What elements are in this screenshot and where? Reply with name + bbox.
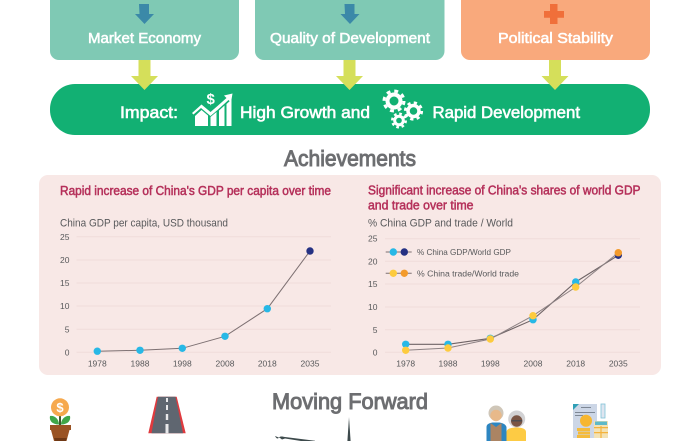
x axis labels: 1998 [481,358,500,368]
x axis labels: 1978 [396,358,415,368]
label: high growth and: High Growth and [240,103,370,122]
icon: down arrow [135,4,154,24]
arrow: market economy to impact [131,60,158,90]
x axis labels: 2008 [216,358,235,368]
y axis labels: 0 [373,348,378,358]
label: rapid development: Rapid Development [432,103,580,122]
x axis labels: 2035 [301,358,320,368]
y axis labels: 0 [65,348,70,358]
panel: achievements charts [39,175,661,375]
chart subtitle: % China GDP and trade / World [368,218,513,230]
GDP series [402,252,622,348]
x axis labels: 2008 [524,358,543,368]
x axis labels: 1978 [88,358,107,368]
icon: road [148,397,186,433]
x axis labels: 1988 [439,358,458,368]
chart: shares of world GDP and trade [368,184,640,368]
panel: market economy [50,0,239,60]
arrow: political stability to impact [542,60,568,90]
y axis labels: 15 [368,279,378,289]
label: impact: Impact: [120,103,178,122]
legend: % China trade/World trade [417,268,519,278]
panel: impact bar [50,84,650,135]
y axis labels [368,234,378,358]
y axis labels: 25 [60,232,70,242]
label: quality of development: Quality of Development [270,30,431,47]
y axis labels: 10 [60,301,70,311]
y axis labels: 25 [368,234,378,244]
chart subtitle: China GDP per capita, USD thousand [60,218,228,230]
panel: political stability [461,0,650,60]
icon: financial documents [573,404,608,438]
label: market economy: Market Economy [88,30,201,47]
legend: % China GDP/World GDP [417,247,511,257]
x axis labels [88,358,320,368]
chart title: Significant increase of China's shares of world GDP [368,184,640,198]
icon: gears [384,91,422,127]
line series [97,251,310,351]
trade series [402,249,622,354]
x axis labels: 1988 [131,358,150,368]
heading: moving forward: Moving Forward [272,389,428,414]
chart: GDP per capita [60,184,331,368]
icon: elderly couple [486,406,526,441]
x axis labels: 2018 [258,358,277,368]
x axis labels: 1998 [173,358,192,368]
icon: spike fragment [347,417,351,441]
y axis labels: 10 [368,302,378,312]
x axis labels: 2018 [566,358,585,368]
x axis labels [396,358,628,368]
icon: money plant [50,398,71,441]
y axis labels: 5 [373,325,378,335]
label: political stability: Political Stability [498,30,614,47]
chart title: Rapid increase of China's GDP per capita over time [60,184,331,198]
y axis labels: 20 [368,256,378,266]
heading: achievements: Achievements [284,146,416,171]
x axis labels: 2035 [609,358,628,368]
panel: quality of development [255,0,444,60]
y axis labels: 5 [65,324,70,334]
icon: growth chart [192,91,232,126]
legend [386,247,519,278]
icon: plus [544,4,564,24]
icon: growth chart: $ [206,91,216,108]
icon: money plant: $ [56,400,64,415]
icon: road mark fragment [275,436,315,441]
chart: shares of world GDP and trade: and trade over time [368,198,474,212]
y axis labels [60,232,70,358]
data points [94,247,314,355]
y axis labels: 15 [60,278,70,288]
y axis labels: 20 [60,255,70,265]
icon: down arrow [340,4,360,24]
arrow: quality of development to impact [336,60,363,90]
